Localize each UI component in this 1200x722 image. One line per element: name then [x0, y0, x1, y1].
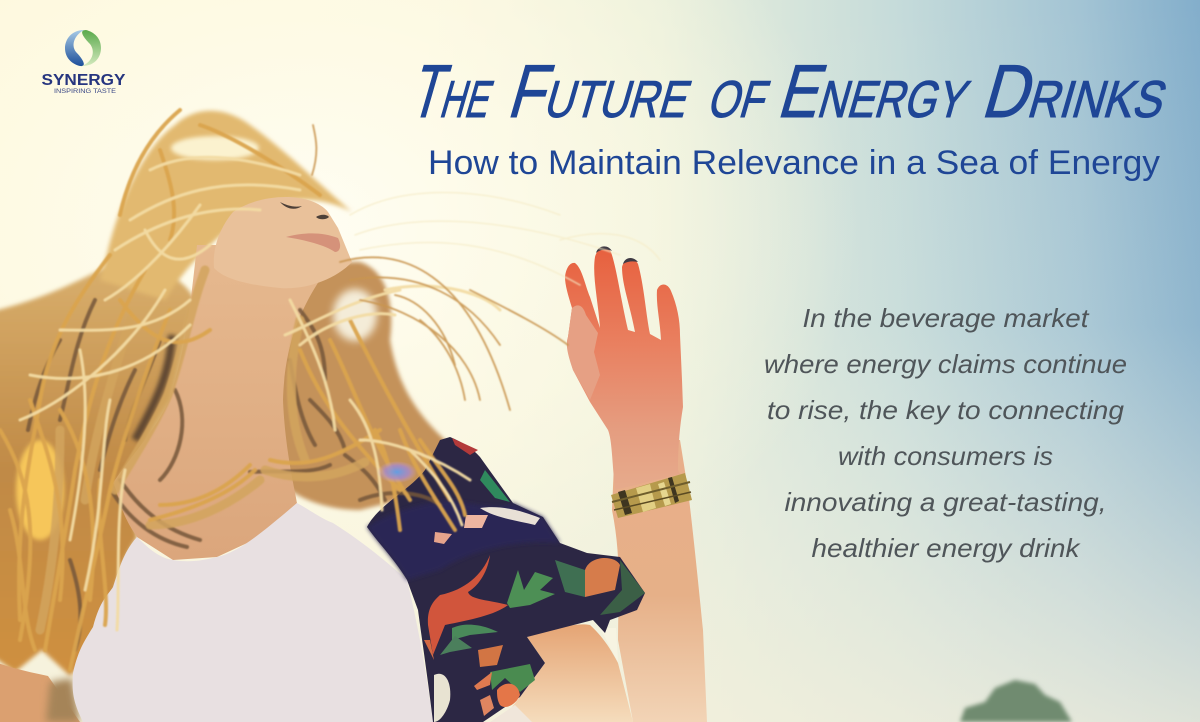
fingernails	[596, 246, 638, 264]
face	[214, 197, 352, 288]
neck and chest	[113, 245, 345, 560]
logo: Synergy	[42, 30, 126, 95]
pale highlights	[20, 157, 500, 630]
gap between sleeve and arm	[600, 628, 618, 662]
logo wordmark: SYNERGY	[42, 72, 126, 89]
pale shirt hem under the arm	[490, 705, 532, 722]
subtitle: How to Maintain Relevance in a Sea of Energy	[428, 144, 1160, 182]
intro paragraph	[764, 303, 1127, 563]
intro paragraph: where energy claims continue	[764, 349, 1127, 379]
title: FUTURE	[501, 50, 703, 134]
white t-shirt	[73, 503, 433, 722]
title: ENERGY	[771, 50, 981, 134]
intro paragraph: In the beverage market	[802, 303, 1090, 333]
intro paragraph: with consumers is	[838, 441, 1053, 471]
floral shirt sleeve	[367, 437, 645, 722]
title: THE	[403, 50, 505, 134]
logo mark	[65, 30, 101, 66]
upper arm	[500, 624, 633, 722]
title: DRINKS	[975, 50, 1179, 134]
photo: woman with windblown hair	[0, 110, 707, 722]
gold wristwatch	[611, 473, 692, 518]
logo tagline: INSPIRING TASTE	[54, 88, 117, 95]
thumb	[567, 305, 600, 400]
dark underlayer	[28, 300, 440, 650]
hair: masses	[0, 111, 495, 722]
lips	[286, 233, 340, 252]
intro paragraph: innovating a great-tasting,	[784, 487, 1106, 517]
lens flare	[377, 461, 417, 483]
golden mid strands	[0, 110, 465, 670]
tree top in the bottom corner	[960, 680, 1072, 722]
hair strands	[0, 110, 660, 670]
intro paragraph: healthier energy drink	[812, 533, 1082, 563]
hand	[565, 246, 683, 490]
fine flyaway strands	[312, 125, 568, 410]
title: OF	[703, 71, 775, 129]
title	[403, 50, 1179, 134]
intro paragraph: to rise, the key to connecting	[767, 395, 1125, 425]
forearm	[612, 440, 707, 722]
broad hair sweeps over neck edges	[40, 270, 365, 630]
nostril and eyes	[280, 202, 329, 219]
